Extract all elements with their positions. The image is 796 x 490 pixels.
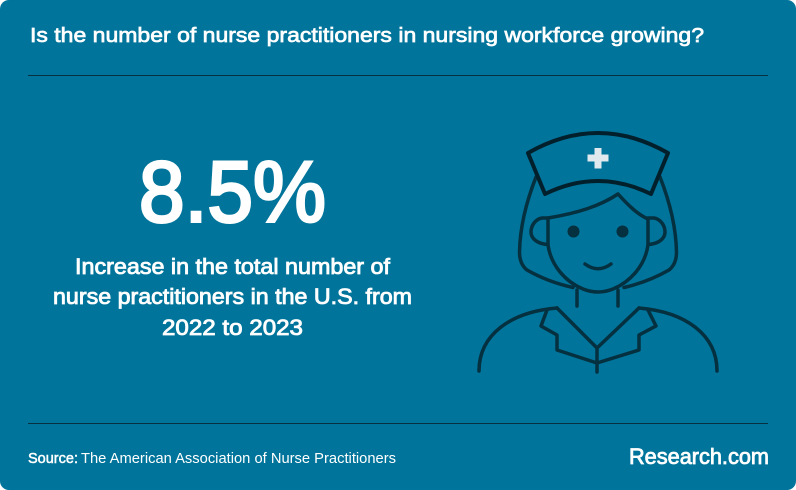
statistic description: nurse practitioners in the U.S. from	[53, 284, 412, 309]
statistic description: Increase in the total number of	[75, 254, 391, 279]
source note: Source:	[28, 451, 78, 467]
cap cross	[588, 148, 608, 168]
source name: The American Association of Nurse Practitioners	[81, 451, 396, 467]
statistic description	[53, 254, 412, 340]
smile	[585, 264, 611, 269]
eyes	[568, 226, 628, 238]
shoulders	[479, 308, 717, 371]
ears	[531, 218, 665, 244]
big statistic: 8.5%	[139, 144, 326, 240]
logo: Research.com: Research.com	[629, 444, 769, 469]
icon: nurse	[479, 133, 717, 372]
neck	[577, 290, 618, 306]
collar	[541, 308, 656, 372]
statistic description: 2022 to 2023	[162, 315, 303, 340]
bangs	[548, 194, 648, 219]
face	[548, 218, 648, 292]
nurse cap	[528, 133, 668, 194]
title: Is the number of nurse practitioners in nursing workforce growing?	[30, 24, 704, 47]
hair	[520, 177, 676, 288]
